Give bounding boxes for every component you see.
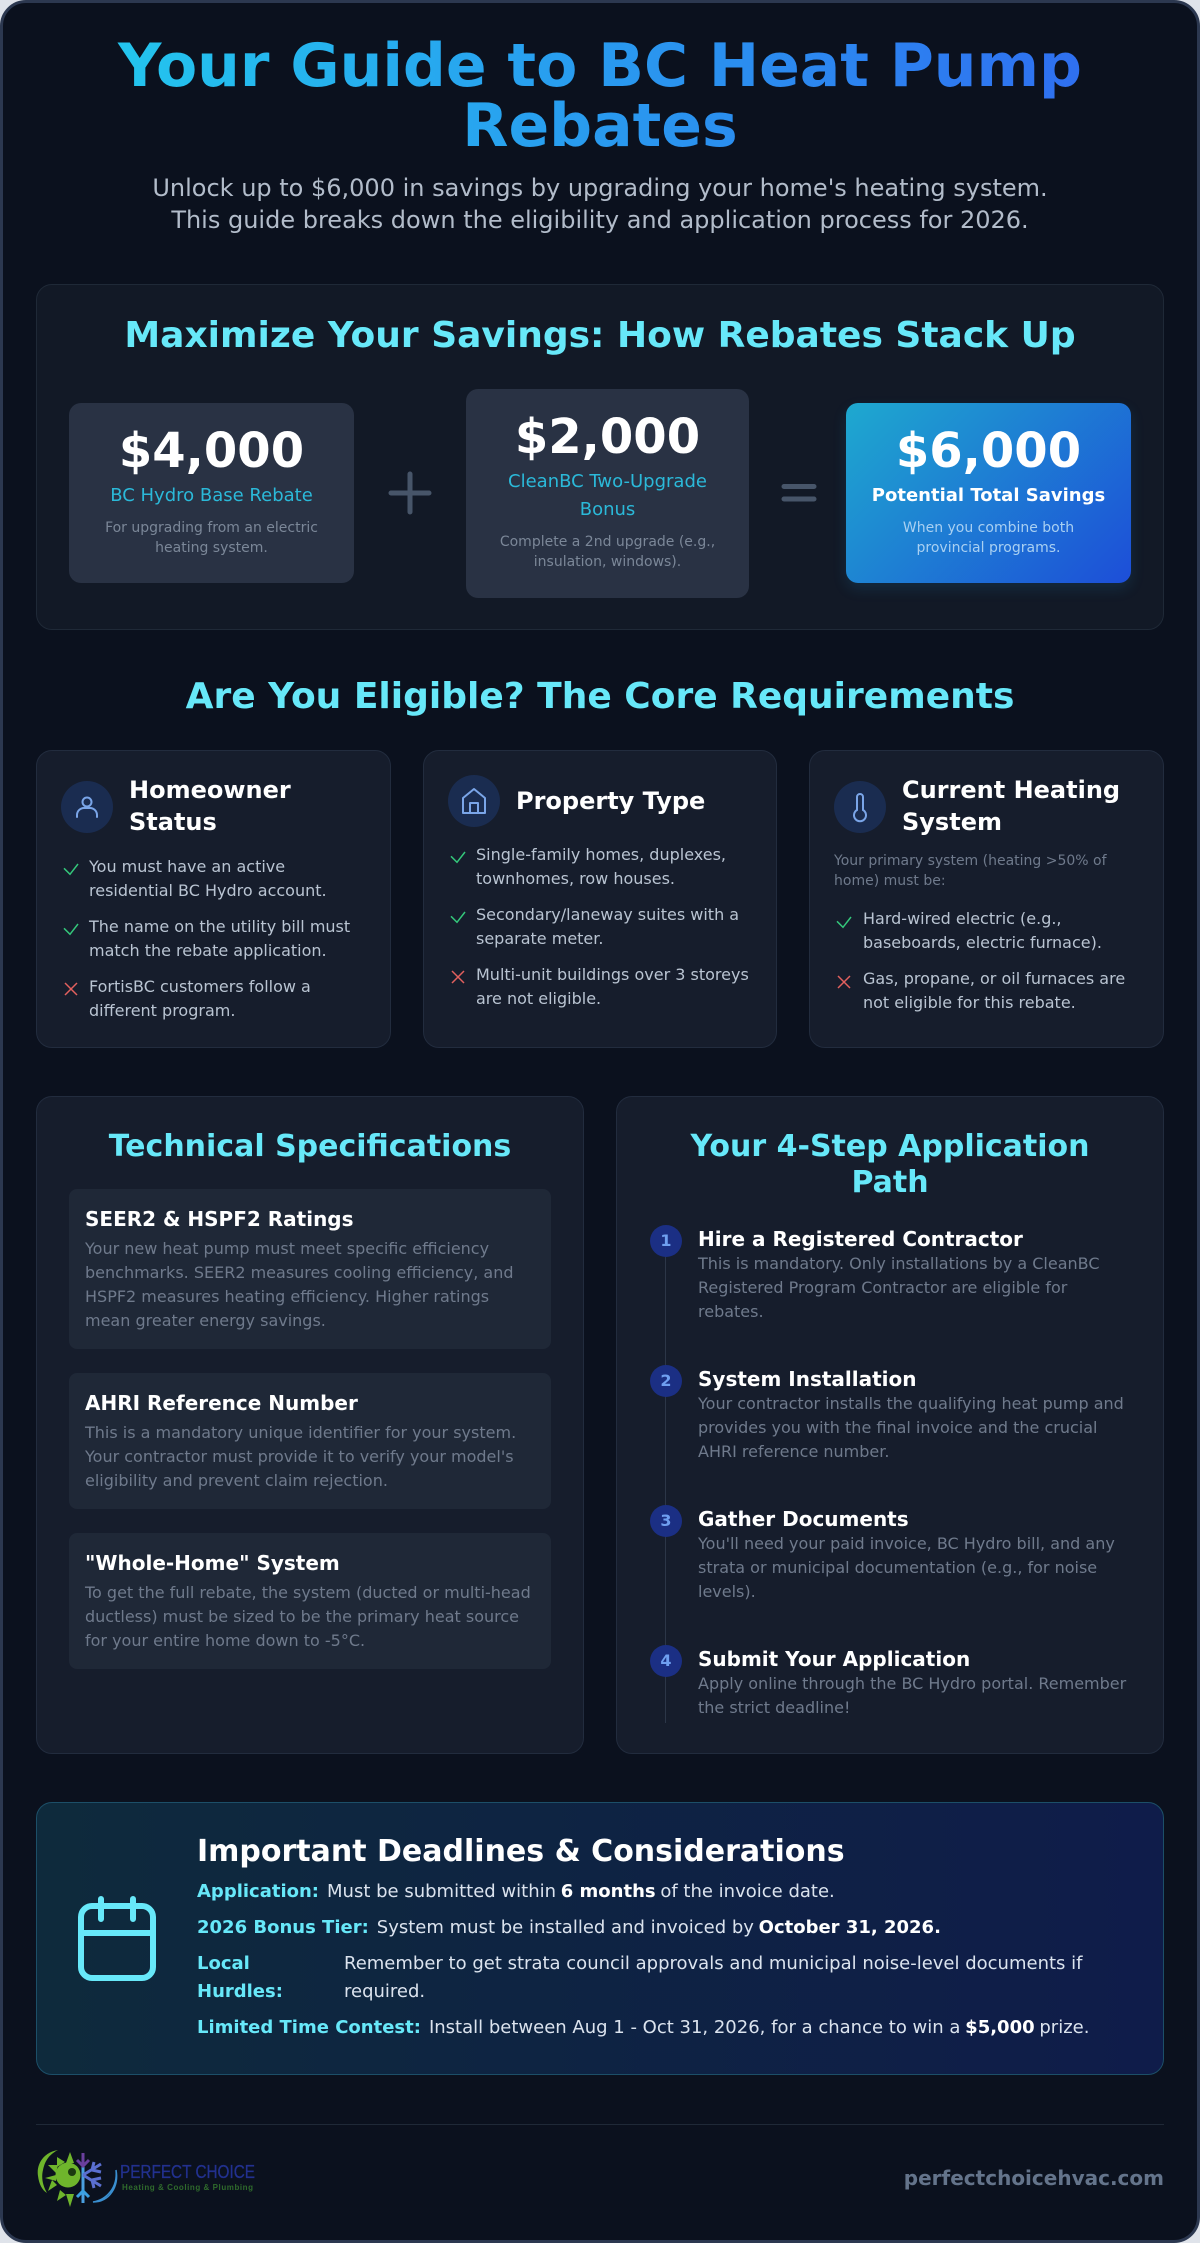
icon: person bbox=[61, 781, 113, 833]
step 4 bbox=[650, 1645, 1126, 1717]
note: provincial programs. bbox=[917, 540, 1060, 556]
intro note: home) must be: bbox=[834, 873, 946, 889]
icon: check bbox=[450, 852, 466, 864]
heading: Your 4-Step Application bbox=[690, 1129, 1090, 1164]
step text: strata or municipal documentation (e.g., for noise bbox=[698, 1558, 1097, 1577]
deadline: bonus tier: 2026 Bonus Tier: System must be installed and invoiced by October 31, 2026. bbox=[197, 1917, 941, 1938]
label: Potential Total Savings bbox=[872, 485, 1105, 506]
list item bbox=[89, 977, 311, 1020]
icon: house bbox=[448, 775, 500, 827]
spec: AHRI reference bbox=[69, 1373, 551, 1509]
label: Bonus bbox=[580, 499, 635, 520]
amount: $6,000 bbox=[896, 423, 1081, 479]
card heading: Property Type bbox=[516, 787, 705, 815]
spec text: This is a mandatory unique identifier for your system. bbox=[85, 1423, 516, 1442]
text: required. bbox=[344, 1981, 425, 2002]
heading: eligibility: Are You Eligible? The Core Requirements bbox=[186, 676, 1014, 717]
list item: You must have an active bbox=[89, 857, 285, 876]
spec title: "Whole-Home" System bbox=[85, 1551, 340, 1575]
panel: homeowner status bbox=[36, 750, 391, 1048]
subtitle: Unlock up to $6,000 in savings by upgrading your home's heating system. bbox=[152, 174, 1048, 202]
icon: cross bbox=[64, 982, 78, 996]
footer divider bbox=[36, 2124, 1164, 2125]
label: Local bbox=[197, 1953, 250, 1974]
spec: SEER2 and HSPF2 bbox=[69, 1189, 551, 1349]
spec text: ductless) must be sized to be the primary heat source bbox=[85, 1607, 519, 1626]
text bbox=[344, 1950, 1082, 2006]
spec text bbox=[85, 1423, 516, 1490]
spec text bbox=[85, 1583, 531, 1650]
step 2 bbox=[650, 1365, 1124, 1461]
step title: System Installation bbox=[698, 1367, 917, 1391]
subtitle: This guide breaks down the eligibility and application process for 2026. bbox=[171, 206, 1029, 234]
note: When you combine both bbox=[903, 520, 1074, 536]
amount: $4,000 bbox=[119, 423, 304, 479]
text: Remember to get strata council approvals and municipal noise-level documents if bbox=[344, 1953, 1082, 1974]
spec text bbox=[85, 1239, 514, 1330]
list item: match the rebate application. bbox=[89, 941, 327, 960]
step number bbox=[650, 1505, 682, 1537]
logo: Perfect Choice bbox=[30, 2140, 265, 2212]
spec title: AHRI Reference Number bbox=[85, 1391, 358, 1415]
spec text: for your entire home down to -5°C. bbox=[85, 1631, 365, 1650]
list item: Single-family homes, duplexes, bbox=[476, 845, 726, 864]
heading: maximize savings: Maximize Your Savings: How Rebates Stack Up bbox=[124, 315, 1076, 356]
spec text: To get the full rebate, the system (ducted or multi-head bbox=[85, 1583, 531, 1602]
timeline line bbox=[665, 1257, 666, 1723]
panel: current heating system bbox=[809, 750, 1164, 1048]
card: $4,000 base rebate bbox=[69, 403, 354, 583]
list item: not eligible for this rebate. bbox=[863, 993, 1076, 1012]
list item: are not eligible. bbox=[476, 989, 601, 1008]
spec: whole-home bbox=[69, 1533, 551, 1669]
spec text: benchmarks. SEER2 measures cooling efficiency, and bbox=[85, 1263, 514, 1282]
step title: Submit Your Application bbox=[698, 1647, 970, 1671]
website: perfectchoicehvac.com bbox=[904, 2166, 1164, 2190]
step text: levels). bbox=[698, 1582, 756, 1601]
icon: plus bbox=[388, 472, 432, 514]
spec title: SEER2 & HSPF2 Ratings bbox=[85, 1207, 354, 1231]
list item: separate meter. bbox=[476, 929, 603, 948]
icon: check bbox=[450, 912, 466, 924]
step text: provides you with the final invoice and the crucial bbox=[698, 1418, 1097, 1437]
step text bbox=[698, 1534, 1115, 1601]
card heading bbox=[129, 776, 291, 836]
heading bbox=[690, 1129, 1090, 1200]
note bbox=[903, 520, 1074, 556]
step text: This is mandatory. Only installations by a CleanBC bbox=[698, 1254, 1100, 1273]
icon: check bbox=[64, 924, 78, 936]
note: insulation, windows). bbox=[534, 554, 681, 570]
step text bbox=[698, 1254, 1100, 1321]
list item bbox=[89, 857, 327, 900]
step text: the strict deadline! bbox=[698, 1698, 850, 1717]
spec text: HSPF2 measures heating efficiency. Higher ratings bbox=[85, 1287, 489, 1306]
list item: Gas, propane, or oil furnaces are bbox=[863, 969, 1125, 988]
list item: FortisBC customers follow a bbox=[89, 977, 311, 996]
list item: Hard-wired electric (e.g., bbox=[863, 909, 1062, 928]
intro note bbox=[834, 853, 1107, 889]
label: BC Hydro Base Rebate bbox=[110, 485, 313, 506]
step 3 bbox=[650, 1505, 1115, 1601]
step text: Your contractor installs the qualifying heat pump and bbox=[698, 1394, 1124, 1413]
icon: check bbox=[836, 916, 852, 928]
card: $6,000 total bbox=[846, 403, 1131, 583]
icon: cross bbox=[838, 976, 850, 988]
label: Hurdles: bbox=[197, 1981, 283, 2002]
note: heating system. bbox=[155, 540, 268, 556]
title: Your Guide to BC Heat Pump bbox=[118, 31, 1082, 101]
note: Complete a 2nd upgrade (e.g., bbox=[500, 534, 715, 550]
callout heading: Important Deadlines & Considerations bbox=[197, 1834, 845, 1869]
step text: Apply online through the BC Hydro portal. Remember bbox=[698, 1674, 1126, 1693]
step number: 3 bbox=[660, 1511, 672, 1530]
step 1 bbox=[650, 1225, 1100, 1321]
list item: residential BC Hydro account. bbox=[89, 881, 327, 900]
list item bbox=[476, 845, 726, 888]
step title: Gather Documents bbox=[698, 1507, 909, 1531]
label bbox=[197, 1950, 283, 2006]
step number bbox=[650, 1365, 682, 1397]
step text bbox=[698, 1394, 1124, 1461]
spec text: Your contractor must provide it to verify your model's bbox=[85, 1447, 514, 1466]
step number bbox=[650, 1225, 682, 1257]
amount: $2,000 bbox=[515, 409, 700, 465]
spec text: Your new heat pump must meet specific efficiency bbox=[85, 1239, 489, 1258]
subtitle bbox=[152, 174, 1048, 234]
heading: Path bbox=[851, 1165, 929, 1200]
note: For upgrading from an electric bbox=[105, 520, 318, 536]
step number: 2 bbox=[660, 1371, 672, 1390]
card heading: System bbox=[902, 808, 1002, 836]
step number bbox=[650, 1645, 682, 1677]
list item bbox=[88, 917, 350, 960]
snowflake bbox=[77, 2153, 117, 2203]
step text: Registered Program Contractor are eligible for bbox=[698, 1278, 1067, 1297]
list item: Multi-unit buildings over 3 storeys bbox=[476, 965, 749, 984]
deadline: application: Application: Must be submitted within 6 months of the invoice date. bbox=[197, 1881, 835, 1902]
list item: baseboards, electric furnace). bbox=[863, 933, 1102, 952]
deadline: local hurdles bbox=[197, 1950, 1147, 2006]
title bbox=[36, 36, 1164, 156]
spec text: eligibility and prevent claim rejection. bbox=[85, 1471, 388, 1490]
note bbox=[500, 534, 715, 570]
panel: application path bbox=[616, 1096, 1164, 1754]
panel: property type bbox=[423, 750, 777, 1048]
step number: 1 bbox=[660, 1231, 672, 1250]
list item: Secondary/laneway suites with a bbox=[476, 905, 739, 924]
panel: technical specifications bbox=[36, 1096, 584, 1754]
list item: different program. bbox=[89, 1001, 235, 1020]
icon: equals bbox=[782, 484, 816, 502]
list item bbox=[476, 965, 749, 1008]
intro note: Your primary system (heating >50% of bbox=[834, 853, 1107, 869]
step text: You'll need your paid invoice, BC Hydro bill, and any bbox=[698, 1534, 1115, 1553]
card heading bbox=[902, 776, 1120, 836]
step title: Hire a Registered Contractor bbox=[698, 1227, 1023, 1251]
label bbox=[508, 471, 707, 520]
step text: AHRI reference number. bbox=[698, 1442, 889, 1461]
list item bbox=[476, 905, 739, 948]
icon: thermometer bbox=[834, 781, 886, 833]
label: CleanBC Two-Upgrade bbox=[508, 471, 707, 492]
card heading: Status bbox=[129, 808, 217, 836]
icon: cross bbox=[452, 970, 464, 984]
icon: check bbox=[64, 864, 78, 876]
list item: townhomes, row houses. bbox=[476, 869, 675, 888]
panel: savings stack bbox=[36, 284, 1164, 630]
list item bbox=[863, 969, 1125, 1012]
step text bbox=[698, 1672, 1126, 1720]
callout: deadlines bbox=[36, 1802, 1164, 2075]
list item bbox=[863, 909, 1102, 952]
step text: rebates. bbox=[698, 1302, 764, 1321]
tagline: Heating & Cooling & Plumbing bbox=[122, 2183, 253, 2192]
spec text: mean greater energy savings. bbox=[85, 1311, 326, 1330]
card heading: Homeowner bbox=[129, 776, 291, 804]
card heading: Current Heating bbox=[902, 776, 1120, 804]
title: Rebates bbox=[462, 91, 738, 161]
note bbox=[105, 520, 318, 556]
list item: The name on the utility bill must bbox=[89, 917, 350, 936]
icon: calendar bbox=[76, 1895, 160, 1983]
deadline: contest: Limited Time Contest: Install between Aug 1 - Oct 31, 2026, for a chance to win a $5,000 prize. bbox=[197, 2017, 1089, 2038]
card: $2,000 bonus bbox=[466, 389, 749, 598]
step number: 4 bbox=[660, 1651, 672, 1670]
heading: Technical Specifications bbox=[109, 1129, 511, 1164]
sun bbox=[38, 2150, 80, 2207]
